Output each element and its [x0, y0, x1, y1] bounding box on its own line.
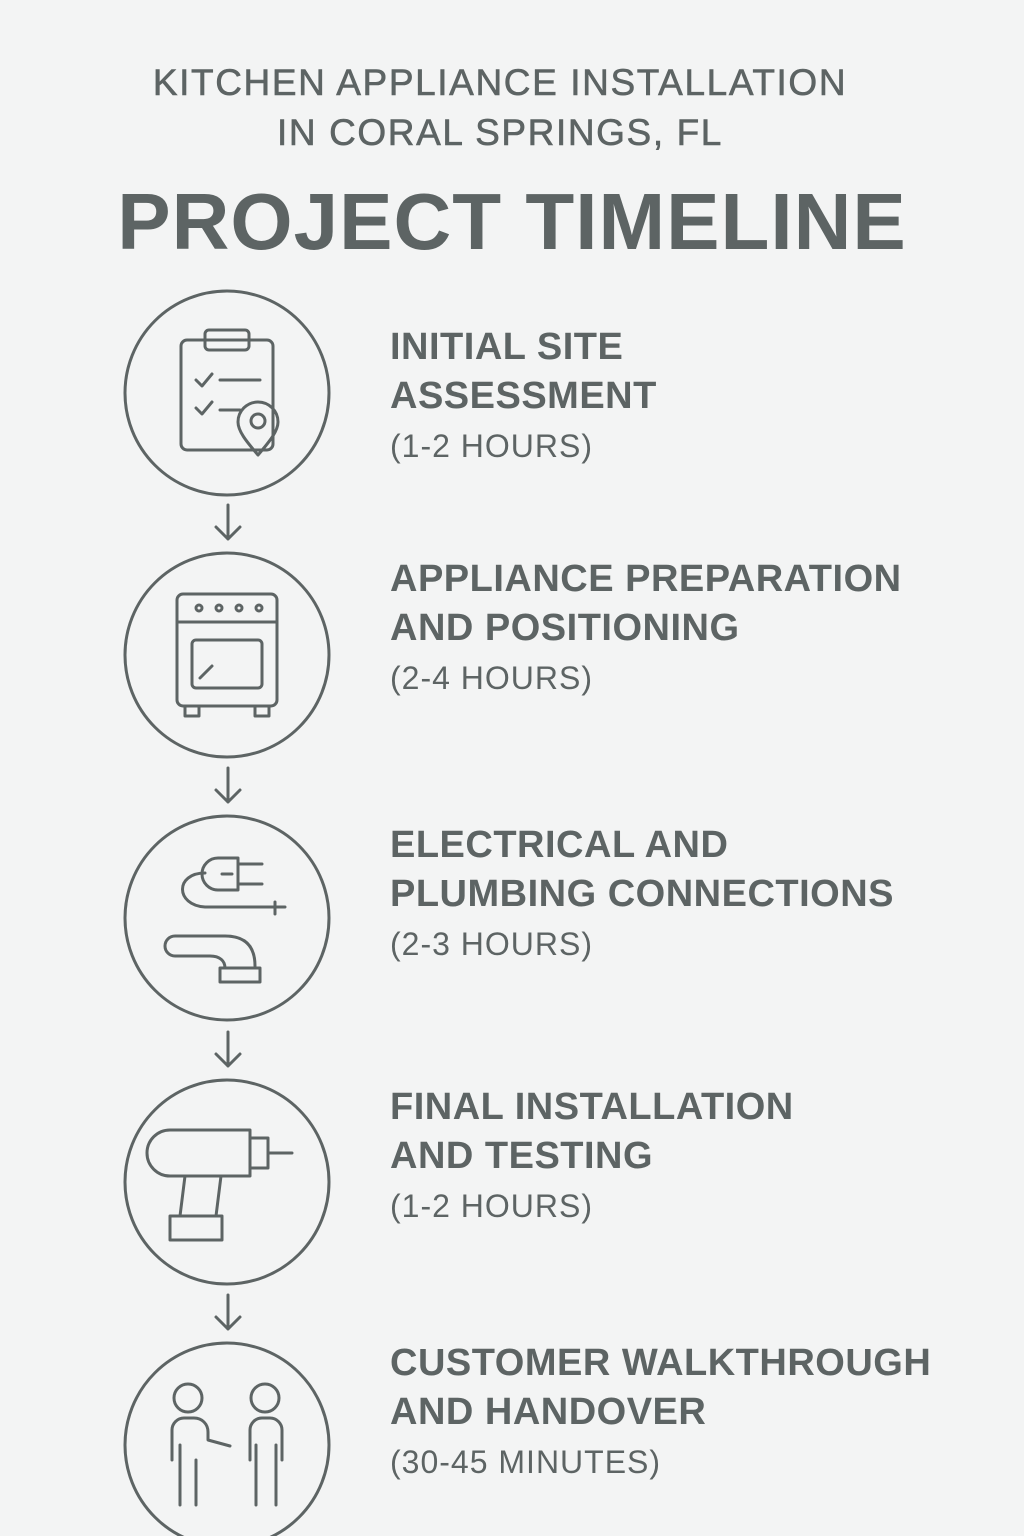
- step 1 text: (1-2 HOURS): [390, 428, 593, 464]
- step 5 text: [390, 1342, 931, 1480]
- step 1 text: INITIAL SITE: [390, 326, 623, 368]
- step 4 text: AND TESTING: [390, 1135, 653, 1177]
- arrow: [216, 1032, 240, 1066]
- step 2 text: [390, 558, 902, 696]
- step 1 text: ASSESSMENT: [390, 375, 657, 417]
- step 2 text: APPLIANCE PREPARATION: [390, 558, 902, 600]
- step 3 text: PLUMBING CONNECTIONS: [390, 873, 894, 915]
- icon: clipboard: [125, 291, 329, 495]
- subtitle: [153, 62, 847, 153]
- step 4 text: [390, 1086, 794, 1224]
- step 1 text: [390, 326, 657, 464]
- icon: oven: [125, 553, 329, 757]
- step 4 text: (1-2 HOURS): [390, 1188, 593, 1224]
- subtitle: KITCHEN APPLIANCE INSTALLATION: [153, 62, 847, 103]
- arrow: [216, 768, 240, 802]
- step 5 text: CUSTOMER WALKTHROUGH: [390, 1342, 931, 1384]
- icon: people: [125, 1343, 329, 1536]
- step 5 text: (30-45 MINUTES): [390, 1444, 661, 1480]
- subtitle: IN CORAL SPRINGS, FL: [277, 112, 723, 153]
- step 5 text: AND HANDOVER: [390, 1391, 706, 1433]
- icon: plug and pipe: [125, 816, 329, 1020]
- icon: drill: [125, 1080, 329, 1284]
- arrow: [216, 505, 240, 539]
- title: PROJECT TIMELINE: [117, 177, 907, 266]
- arrow: [216, 1295, 240, 1329]
- step 3 text: (2-3 HOURS): [390, 926, 593, 962]
- step 4 text: FINAL INSTALLATION: [390, 1086, 794, 1128]
- step 2 text: (2-4 HOURS): [390, 660, 593, 696]
- step 3 text: ELECTRICAL AND: [390, 824, 728, 866]
- step 3 text: [390, 824, 894, 962]
- step 2 text: AND POSITIONING: [390, 607, 740, 649]
